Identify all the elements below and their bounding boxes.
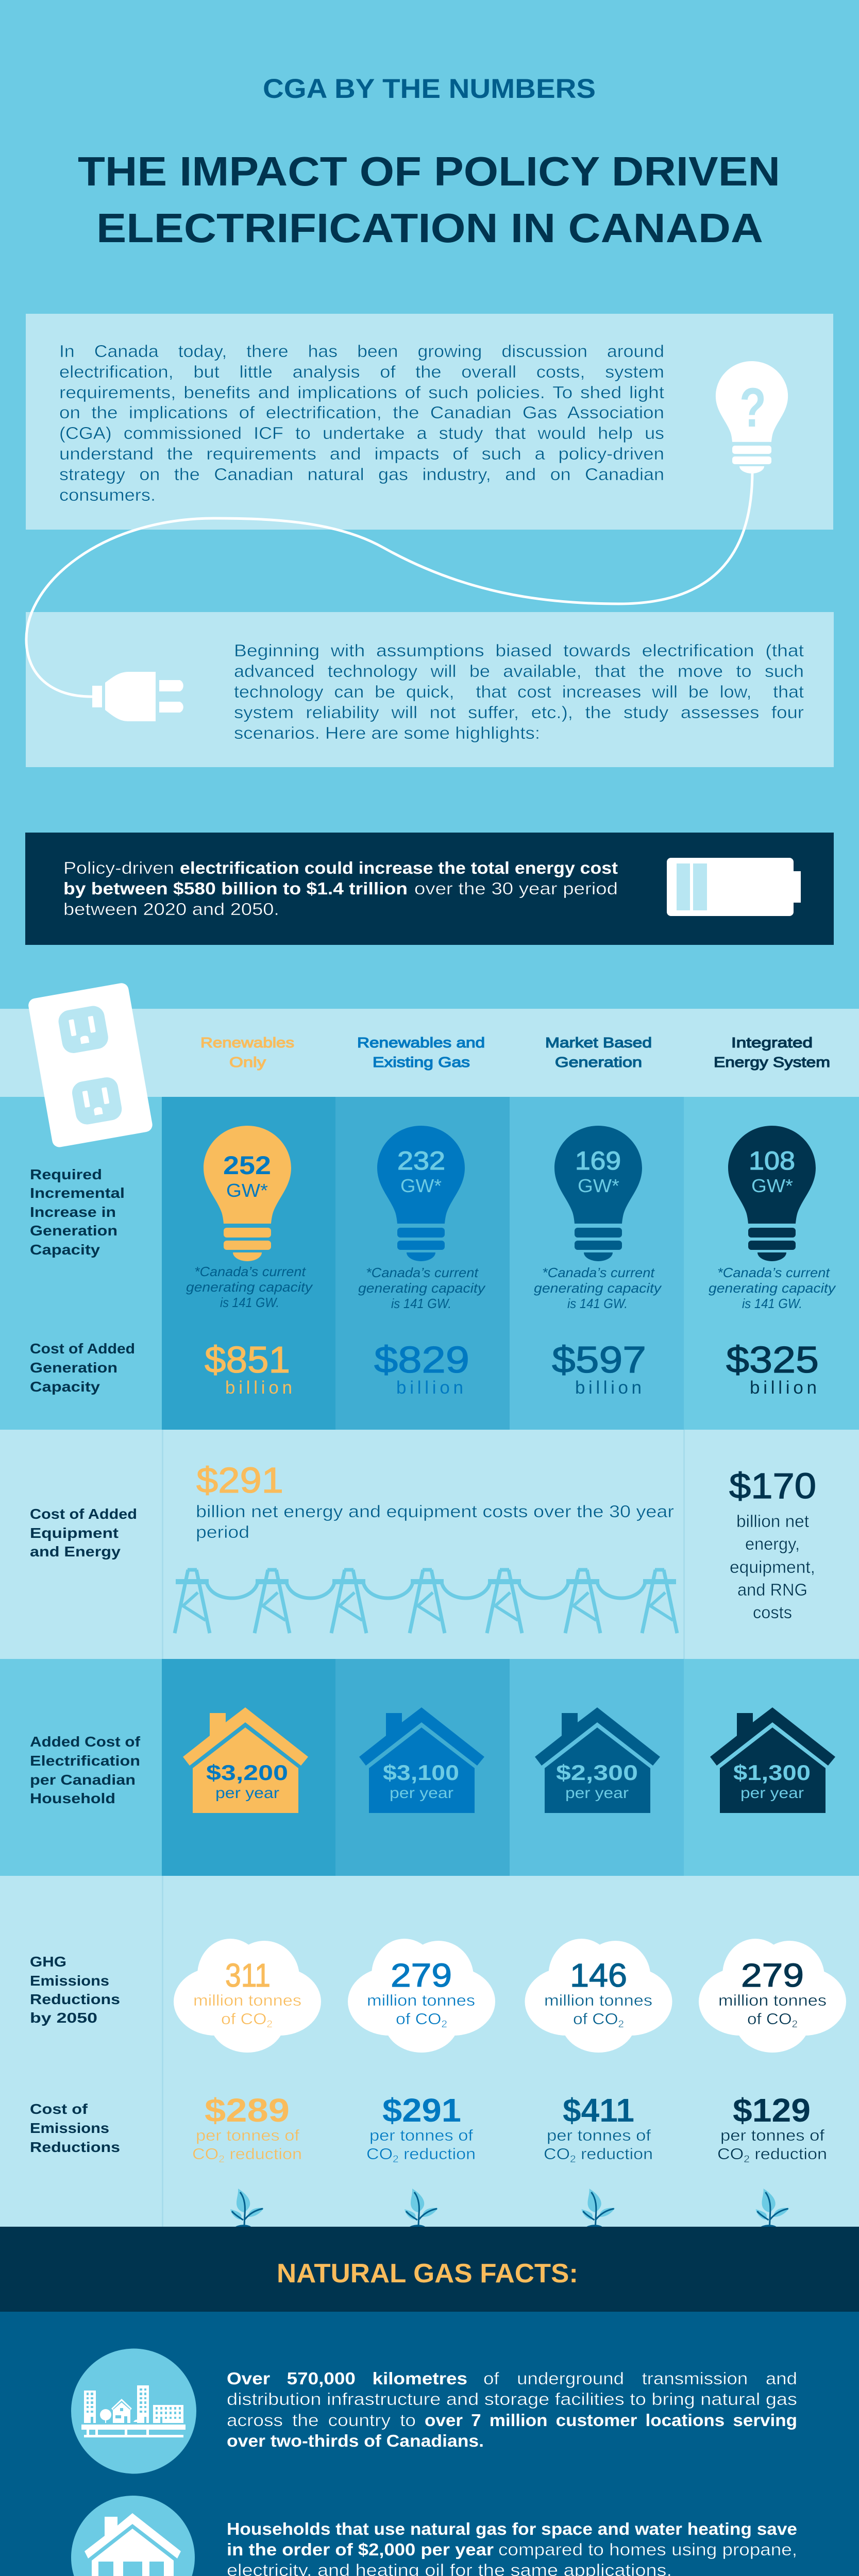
panel: study assumptions (26, 612, 834, 767)
values: cost of emissions reductions: 2 (744, 2154, 750, 2165)
panel: cost of added equipment and energy: costs (753, 1603, 792, 1622)
values: cost of added generation capacity: billion (750, 1378, 817, 1398)
icon: cloud 311 million tonnes: million tonnes (193, 1991, 301, 2009)
callout: total energy cost: between 2020 and 2050. (63, 900, 279, 919)
panel: introduction: electrification, but little analysis of the overall costs, system (59, 362, 664, 381)
footnotes: current generating capacity: generating capacity (534, 1280, 662, 1296)
icon: cloud 279 million tonnes: of CO (396, 2010, 437, 2028)
callout: total energy cost: Policy-driven (63, 858, 174, 877)
icon: house $3,200: $3,200 (206, 1760, 288, 1785)
icon: bulb renewables only 252 GW: GW* (226, 1180, 268, 1201)
icon: cloud 279 million tonnes: 279 (391, 1957, 452, 1994)
icon: house $3,100 (359, 1707, 484, 1813)
panel: scenario header band: Energy System (714, 1054, 830, 1070)
panel: emissions (0, 1876, 859, 2227)
title: ELECTRIFICATION IN CANADA (96, 205, 763, 251)
title (78, 148, 780, 251)
values: cost of emissions reductions: per tonnes of (369, 2126, 473, 2144)
panel: scenario header band: Only (229, 1054, 266, 1070)
row label: added cost per household: Added Cost of (30, 1734, 141, 1750)
subtitle: CGA by the numbers: CGA BY THE NUMBERS (263, 74, 596, 104)
icon: bulb market based generation 169 GW: 169 (575, 1146, 621, 1175)
panel: cost of added equipment and energy: $291 (196, 1460, 283, 1500)
icon: cloud 146 million tonnes: of CO (573, 2010, 615, 2028)
icon: bulb renewables and existing gas 232 GW (377, 1126, 465, 1261)
footnotes: current generating capacity: is 141 GW. (391, 1296, 451, 1311)
row label: cost of added generation capacity (30, 1341, 135, 1395)
values: cost of emissions reductions: CO (366, 2145, 391, 2163)
text block: kilometres of infrastructure (227, 2369, 797, 2450)
values: cost of emissions reductions: per tonnes of (720, 2126, 824, 2144)
row label: required incremental increase (30, 1166, 125, 1258)
callout: total energy cost: electrification could increase the total energy cost (180, 858, 618, 877)
icon: house circle (71, 2496, 195, 2576)
values: cost of emissions reductions (192, 2092, 827, 2165)
row label: added cost per household (30, 1734, 141, 1806)
icon: house $2,300 (535, 1707, 660, 1813)
panel: cost of added equipment and energy: equipment, (730, 1557, 815, 1577)
icon: city infrastructure circle (71, 2348, 196, 2474)
row label: GHG emissions reductions by 2050: by 2050 (30, 2010, 97, 2026)
row label: cost of added generation capacity: Capacity (30, 1379, 100, 1395)
values: cost of added generation capacity: $325 (726, 1340, 819, 1381)
row label: GHG emissions reductions by 2050: Emissions (30, 1973, 109, 1989)
icon: bulb integrated energy system 108 GW: GW* (751, 1175, 793, 1196)
panel: introduction: requirements, benefits and implications of such policies. To shed light (59, 383, 664, 402)
values: cost of added generation capacity: billion (575, 1378, 642, 1398)
icon: cloud 146 million tonnes: million tonnes (544, 1991, 652, 2009)
values: cost of emissions reductions: $129 (733, 2092, 811, 2129)
icon: cloud 146 million tonnes (525, 1939, 672, 2053)
footnotes: current generating capacity: is 141 GW. (742, 1296, 802, 1311)
icon: cloud 279 million tonnes integrated: million tonnes (718, 1991, 827, 2009)
panel: natural gas facts background (0, 2312, 859, 2576)
row label: required incremental increase: Required (30, 1166, 102, 1182)
footnotes: current generating capacity: is 141 GW. (567, 1296, 628, 1311)
heading: natural gas facts (0, 2227, 859, 2312)
icon: battery (667, 858, 801, 916)
icon: house $2,300: $2,300 (556, 1760, 638, 1785)
row label: added cost per household: Electrification (30, 1753, 140, 1769)
row label: cost of added generation capacity: Cost of Added (30, 1341, 135, 1357)
footnotes: current generating capacity: generating capacity (186, 1279, 313, 1295)
values: cost of emissions reductions: 2 (393, 2154, 399, 2165)
panel: cost of added equipment and energy: energy, (745, 1534, 800, 1553)
values: cost of added generation capacity: billion (225, 1378, 292, 1398)
panel: introduction: In Canada today, there has been growing discussion around (59, 342, 664, 361)
panel: scenario header band: Existing Gas (373, 1054, 470, 1070)
footnotes: current generating capacity: *Canada’s current (717, 1265, 831, 1280)
footnotes: current generating capacity: *Canada’s current (366, 1265, 479, 1280)
icon: house $3,200: per year (215, 1785, 279, 1802)
text block: household savings: Households that use natural gas for space and water heating save (227, 2519, 797, 2538)
text block: household savings: in the order of $2,000 per year (227, 2540, 494, 2559)
values: cost of emissions reductions: 2 (218, 2154, 225, 2165)
panel: introduction (26, 314, 833, 530)
panel: scenario header band: Renewables (200, 1035, 294, 1050)
icon: cloud 279 million tonnes integrated (699, 1939, 846, 2053)
panel: introduction: understand the requirements and impacts of such a policy-driven (59, 444, 664, 463)
values: cost of added generation capacity (205, 1340, 819, 1398)
values: cost of emissions reductions: CO (717, 2145, 741, 2163)
panel: scenario header band: Integrated (731, 1035, 813, 1050)
icon: cloud 311 million tonnes (174, 1939, 321, 2053)
row label: cost of emissions reductions: Reductions (30, 2139, 120, 2155)
text block: kilometres of infrastructure: of underground transmission and (483, 2369, 797, 2388)
icon: bulb integrated energy system 108 GW (728, 1126, 816, 1261)
panel: introduction: consumers. (59, 485, 156, 504)
panel: introduction: strategy on the Canadian natural gas industry, and on Canadian (59, 465, 664, 484)
icon: house $2,300: per year (565, 1785, 629, 1802)
values: cost of emissions reductions: $291 (382, 2092, 461, 2129)
row label: GHG emissions reductions by 2050 (30, 1954, 120, 2026)
panel: generation columns (162, 1097, 684, 1430)
values: cost of emissions reductions: CO (192, 2145, 216, 2163)
icon: house $3,100: $3,100 (383, 1760, 459, 1785)
text block: kilometres of infrastructure: across the country to (227, 2411, 416, 2430)
icon: house $1,300 (710, 1707, 835, 1813)
row label: cost of emissions reductions (30, 2101, 120, 2155)
text block: kilometres of infrastructure: over 7 million customer locations serving (425, 2411, 797, 2430)
values: cost of emissions reductions: reduction (225, 2145, 302, 2163)
panel: scenario header band (0, 1009, 859, 1097)
row label: required incremental increase: Incremental (30, 1185, 125, 1201)
panel: study assumptions: system reliability will not suffer, etc.), the study assesses four (234, 703, 804, 722)
panel: study assumptions: technology can be quick, that cost increases will be low, that (234, 682, 804, 701)
icon: cloud 279 million tonnes integrated: 279 (741, 1957, 804, 1994)
row label: added cost per household: Household (30, 1790, 115, 1806)
footnotes: current generating capacity: *Canada’s current (542, 1265, 655, 1280)
row label: required incremental increase: Increase in (30, 1204, 116, 1220)
footnotes: current generating capacity: generating capacity (709, 1280, 836, 1296)
icon: bulb renewables and existing gas 232 GW: 232 (397, 1146, 445, 1175)
panel: scenario header band: Renewables and (357, 1035, 485, 1050)
icon: cloud 311 million tonnes: 311 (225, 1957, 271, 1994)
icon: bulb market based generation 169 GW (554, 1126, 642, 1261)
icon: seedlings (230, 2189, 789, 2227)
panel: scenario header band: Market Based (545, 1035, 652, 1050)
callout: total energy cost (25, 833, 834, 945)
panel: cost of added equipment and energy: billion net (736, 1512, 809, 1531)
icon: cloud 279 million tonnes: million tonnes (367, 1991, 475, 2009)
row label: added cost per household: per Canadian (30, 1772, 136, 1788)
row label: required incremental increase: Capacity (30, 1242, 100, 1258)
icon: bulb renewables only 252 GW (204, 1126, 291, 1261)
values: cost of emissions reductions: 2 (570, 2154, 576, 2165)
panel: study assumptions: advanced technology will be available, that the move to such (234, 662, 804, 681)
icon: bulb renewables and existing gas 232 GW: GW* (400, 1175, 442, 1196)
icon: cloud 146 million tonnes: 2 (618, 2019, 624, 2030)
values: cost of added generation capacity: $597 (552, 1340, 646, 1381)
values: cost of added generation capacity: $851 (205, 1340, 290, 1381)
panel: cost of added equipment and energy: $170 (729, 1466, 816, 1506)
values: cost of emissions reductions: reduction (750, 2145, 827, 2163)
row label: GHG emissions reductions by 2050: Reductions (30, 1991, 120, 2007)
text block: household savings: compared to homes using propane, (498, 2540, 797, 2559)
values: cost of emissions reductions: per tonnes of (547, 2126, 651, 2144)
icon: cloud 279 million tonnes: 2 (441, 2019, 447, 2030)
title: THE IMPACT OF POLICY DRIVEN (78, 148, 780, 194)
values: cost of added generation capacity: $829 (374, 1340, 469, 1381)
icon: cloud 311 million tonnes: 2 (266, 2019, 273, 2030)
text block: kilometres of infrastructure: over two-thirds of Canadians. (227, 2431, 484, 2450)
icon: house $3,100: per year (390, 1785, 453, 1802)
values: cost of added generation capacity: billion (396, 1378, 463, 1398)
icon: cloud 146 million tonnes: 146 (570, 1957, 627, 1994)
row label: required incremental increase: Generation (30, 1223, 117, 1239)
icon: house $1,300: per year (740, 1785, 804, 1802)
panel: study assumptions: scenarios. Here are some highlights: (234, 723, 540, 742)
icon: light bulb with question mark (716, 361, 788, 473)
icon: cloud 279 million tonnes (348, 1939, 495, 2053)
values: cost of emissions reductions: per tonnes of (196, 2126, 299, 2144)
panel: introduction: (CGA) commissioned ICF to undertake a study that would help us (59, 423, 664, 443)
panel: cost of added equipment and energy: period (196, 1522, 249, 1541)
values: cost of emissions reductions: reduction (576, 2145, 653, 2163)
text block: household savings (227, 2519, 797, 2576)
footnotes: current generating capacity: is 141 GW. (220, 1295, 279, 1310)
callout: total energy cost: by between $580 billion to $1.4 trillion (63, 879, 408, 898)
icon: cloud 279 million tonnes integrated: of CO (747, 2010, 789, 2028)
icon: wall outlet (27, 982, 154, 1148)
icon: bulb integrated energy system 108 GW: 108 (749, 1146, 795, 1175)
panel: cost of added equipment and energy: billion net energy and equipment costs over the 30 year (196, 1502, 674, 1521)
row label: cost of added generation capacity: Generation (30, 1360, 117, 1376)
icon: bulb renewables only 252 GW: 252 (223, 1151, 271, 1180)
icon: light bulb with question mark: ? (739, 376, 766, 438)
panel: cost of added equipment and energy: and RNG (737, 1580, 807, 1599)
values: cost of emissions reductions: $289 (205, 2092, 290, 2129)
heading: natural gas facts: NATURAL GAS FACTS: (277, 2259, 578, 2289)
footnotes: current generating capacity: generating capacity (358, 1280, 486, 1296)
icon: power cord (26, 471, 752, 697)
row label: cost of emissions reductions: Emissions (30, 2120, 109, 2136)
footnotes: current generating capacity (186, 1264, 836, 1311)
icon: house $1,300: $1,300 (733, 1760, 811, 1785)
callout: total energy cost: over the 30 year period (414, 879, 618, 898)
values: cost of emissions reductions: CO (544, 2145, 568, 2163)
icon: plug (92, 672, 183, 721)
icon: cloud 279 million tonnes integrated: 2 (792, 2019, 798, 2030)
icon: transmission towers (175, 1570, 677, 1633)
icon: cloud 311 million tonnes: of CO (221, 2010, 263, 2028)
panel: household cost columns (162, 1659, 684, 1876)
row label: cost of emissions reductions: Cost of (30, 2101, 88, 2117)
text block: kilometres of infrastructure: Over 570,000 kilometres (227, 2369, 467, 2388)
panel: cost of added equipment and energy: Equipment (30, 1525, 119, 1541)
icon: bulb market based generation 169 GW: GW* (578, 1175, 619, 1196)
panel: study assumptions: Beginning with assumptions biased towards electrification (that (234, 641, 804, 660)
values: cost of emissions reductions: $411 (563, 2092, 634, 2129)
footnotes: current generating capacity: *Canada’s current (194, 1264, 307, 1279)
values: cost of emissions reductions: reduction (399, 2145, 476, 2163)
icon: house $3,200 (183, 1707, 308, 1813)
panel: introduction: on the implications of electrification, the Canadian Gas Association (59, 403, 664, 422)
text block: kilometres of infrastructure: distribution infrastructure and storage facilities to bring natural gas (227, 2389, 797, 2409)
panel: cost of added equipment and energy (0, 1430, 859, 1659)
row label: GHG emissions reductions by 2050: GHG (30, 1954, 66, 1970)
panel: cost of added equipment and energy: and Energy (30, 1544, 121, 1560)
panel: scenario header band: Generation (555, 1054, 642, 1070)
panel: cost of added equipment and energy: Cost of Added (30, 1506, 137, 1522)
